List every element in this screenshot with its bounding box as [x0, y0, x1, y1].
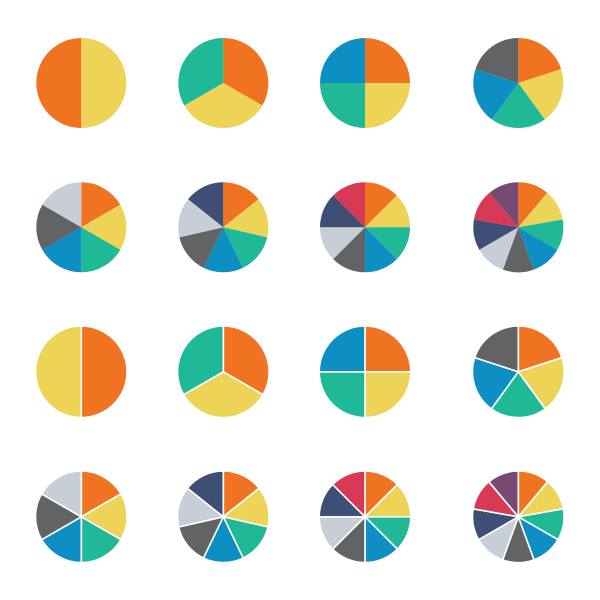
pie with gaps: 6 segments [22, 460, 141, 574]
pie: 4 segments [320, 38, 410, 128]
pie with gaps: 7 segments [171, 460, 281, 574]
pie with gaps: 5 segments [456, 316, 575, 434]
pie with gaps: 3 segments [161, 321, 269, 434]
pie: 2 segments [36, 38, 126, 128]
pie: 5 segments [457, 28, 574, 145]
pie: 8 segments [311, 173, 419, 282]
pie with gaps: 9 segments [464, 463, 570, 570]
pie with gaps: 4 segments [319, 326, 411, 418]
pie: 6 segments [23, 171, 140, 284]
pie: 7 segments [172, 172, 280, 283]
pie: 3 segments [162, 33, 268, 144]
pie: 9 segments [465, 174, 569, 279]
pie with gaps: 8 segments [310, 462, 420, 572]
pie with gaps: 2 segments [35, 326, 127, 418]
